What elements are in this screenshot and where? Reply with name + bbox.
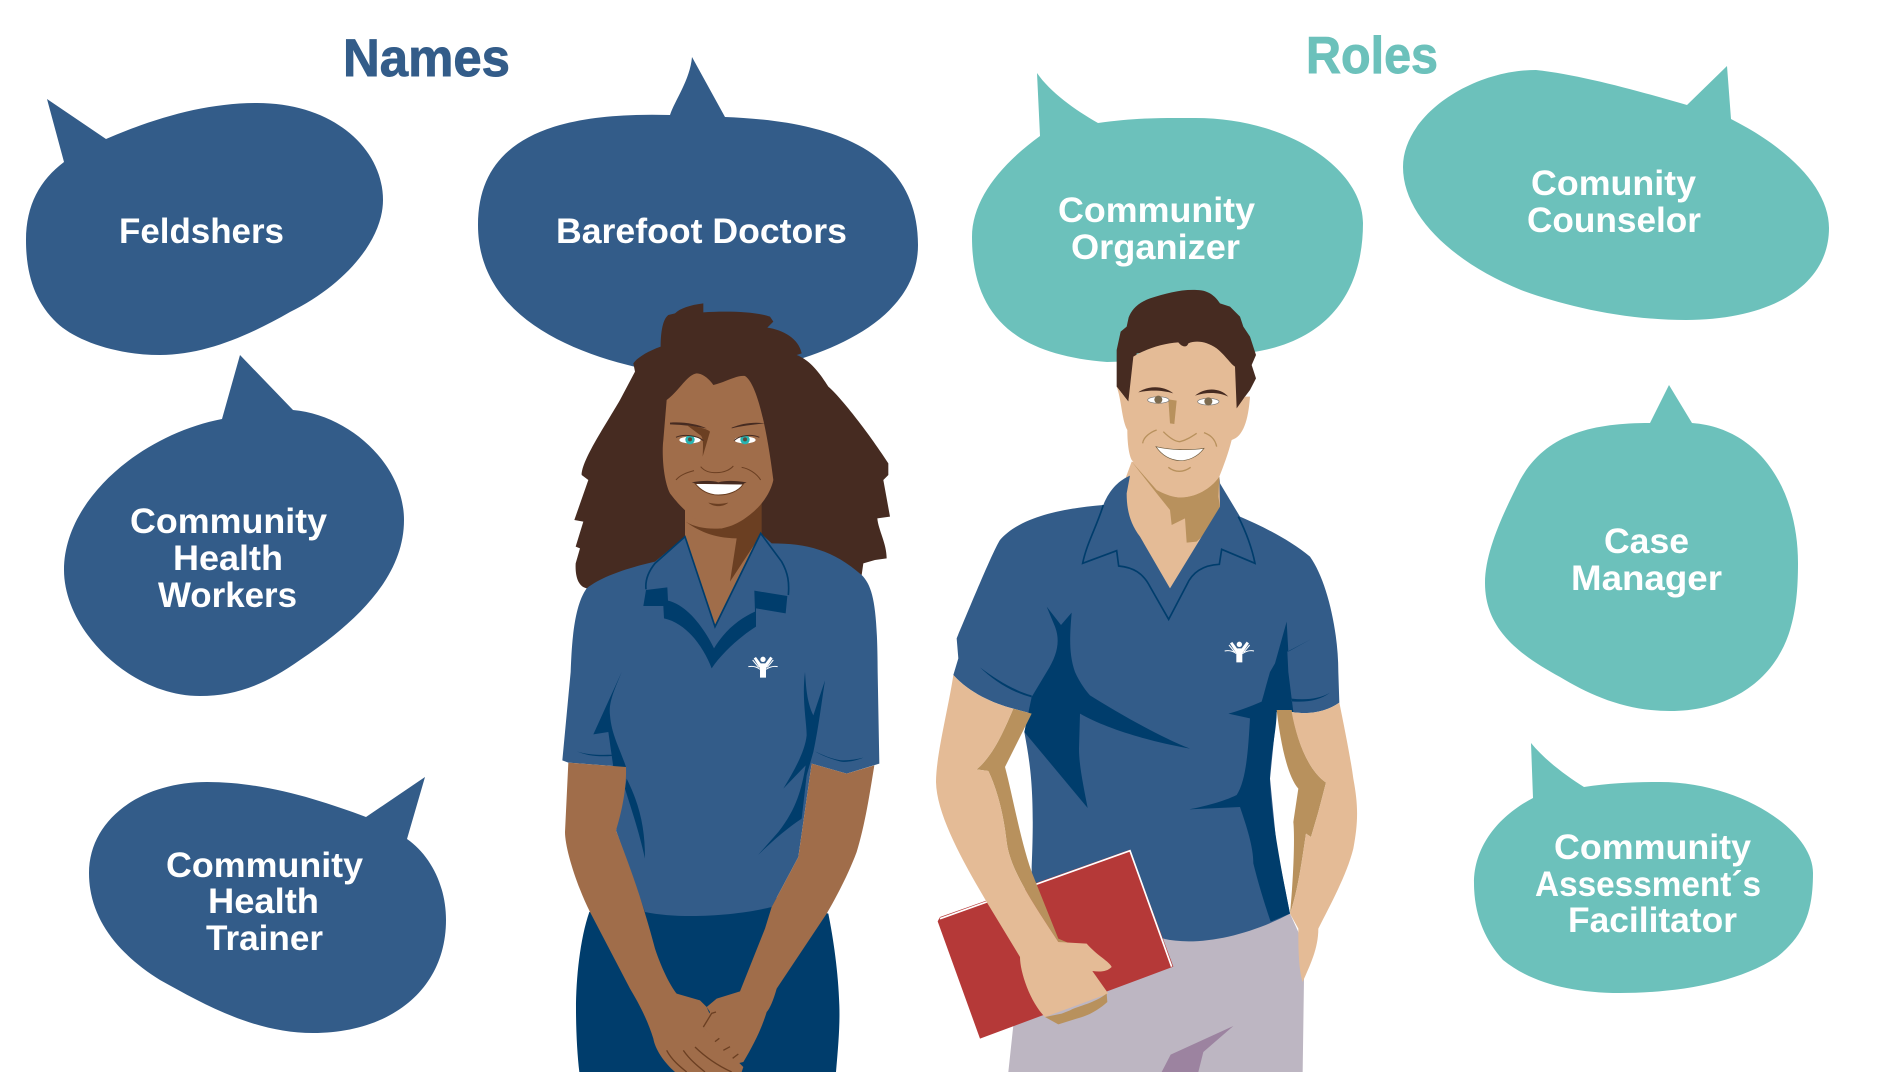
man right arm shadow [1277,710,1326,914]
bubble: Feldshers [26,99,383,355]
man hand shadow [1045,994,1107,1024]
woman left arm [565,763,743,1072]
man right arm [1290,703,1357,982]
man hair [1117,290,1256,409]
bubble: Community Health Workers [64,355,404,696]
bubble: Barefoot Doctors [478,57,918,368]
woman hair [574,303,890,597]
bubble: Case Manager [1485,385,1798,711]
man polo shirt [953,476,1339,941]
woman face [663,373,773,528]
man face [1117,342,1250,497]
woman shirt folds [577,672,863,859]
bubble: Case Manager: Manager [1571,559,1722,598]
woman collar band [643,587,787,668]
man left arm and hand [936,675,1112,1017]
woman logo [748,657,778,678]
bubble: Community Health Trainer: Trainer [206,919,323,958]
bubble: Community Health Trainer: Community [166,846,364,885]
bubble: Comunity Counselor: Comunity [1531,164,1697,203]
man collar outline [1083,505,1255,619]
heading: Roles: Roles [1306,27,1438,85]
bubble: Community Assessment's Facilitator: Assessment´s [1535,865,1761,904]
man neck [1120,462,1223,595]
figure: woman [562,303,890,1072]
bubble: Community Health Workers: Workers [158,576,297,615]
bubble: Community Organizer: Organizer [1071,228,1240,267]
bubble: Comunity Counselor [1403,66,1829,320]
woman neck shadow [686,502,762,582]
bubble: Community Health Trainer: Health [208,882,319,921]
bubble: Community Assessment's Facilitator [1474,743,1813,993]
red book [938,850,1173,1039]
woman neck [685,507,761,628]
bubble: Community Organizer [972,73,1363,362]
heading: Names: Names [343,29,510,88]
man shirt folds [980,607,1330,922]
bubble: Community Health Workers: Health [173,539,283,578]
bubble: Feldshers: Feldshers [119,212,284,251]
bubble: Community Health Trainer [89,777,446,1033]
woman facial features [670,422,765,506]
man trouser fold [1162,1026,1233,1072]
bubble: Community Assessment's Facilitator: Facilitator [1568,901,1737,940]
woman collar outline [646,533,789,627]
man neck shadow [1132,462,1220,543]
bubble: Community Health Workers: Community [130,502,328,541]
bubble: Comunity Counselor: Counselor [1527,201,1701,240]
figure: man [936,290,1357,1072]
man trousers [1008,914,1304,1072]
bubble: Community Organizer: Community [1058,191,1256,230]
woman trousers [576,897,839,1072]
bubble: Case Manager: Case [1604,522,1689,561]
woman finger lines [667,1012,738,1072]
bubble: Barefoot Doctors: Barefoot Doctors [556,212,847,251]
bubble: Community Assessment's Facilitator: Community [1554,828,1752,867]
man left arm shadow [977,709,1070,944]
woman right arm [703,764,874,1064]
man logo [1225,642,1254,662]
woman polo shirt [562,533,879,916]
man facial features [1138,387,1228,471]
